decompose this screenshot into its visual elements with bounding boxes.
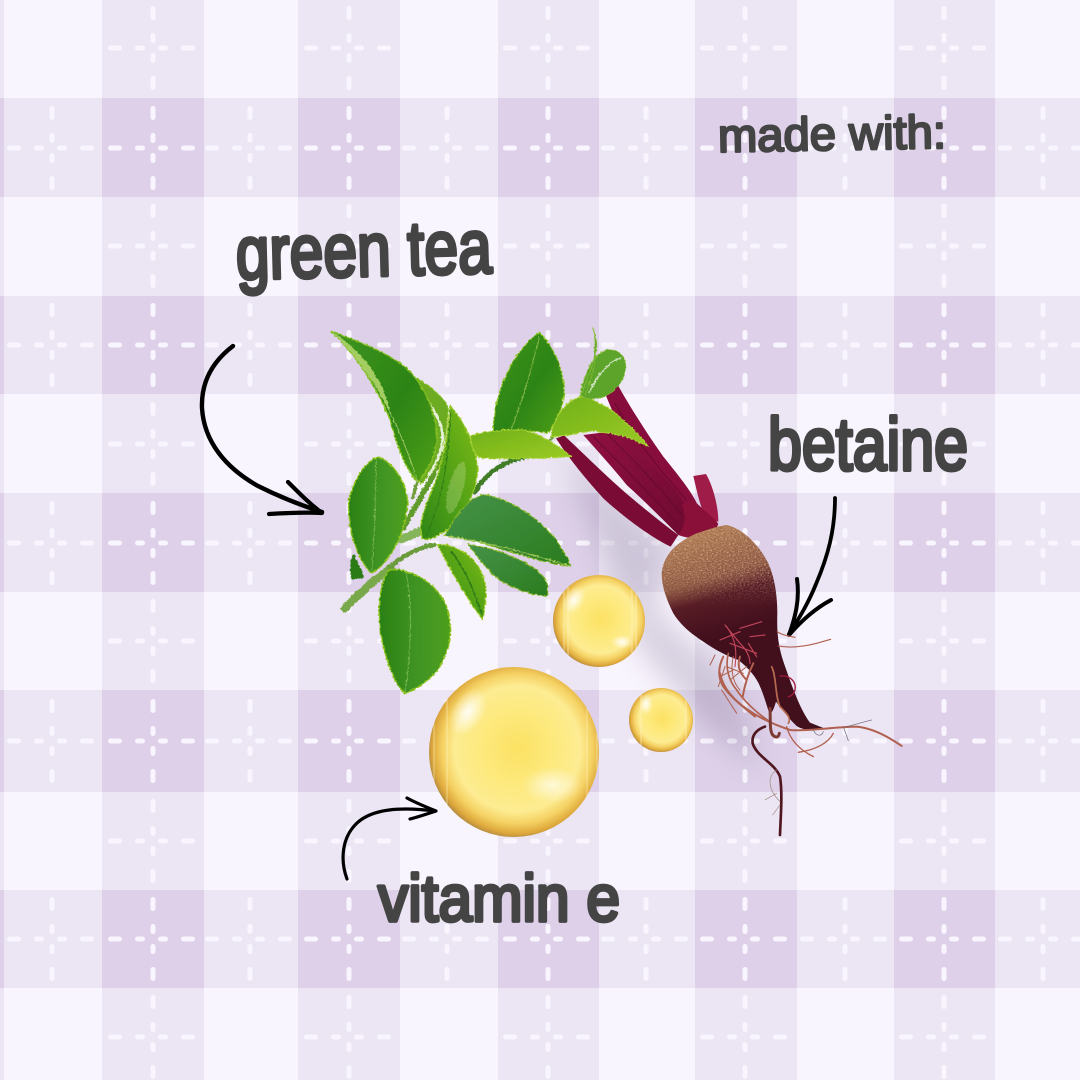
tea leaf: right <box>550 395 647 446</box>
arrow: betaine <box>789 498 835 635</box>
tea leaf: back upper <box>393 365 447 483</box>
tea leaf: left <box>347 456 407 572</box>
vitamin e drops <box>429 575 693 837</box>
drop: medium <box>553 575 645 667</box>
tea leaf: behind right <box>467 543 547 595</box>
tea leaf: center <box>420 405 477 538</box>
drop: large <box>429 667 599 837</box>
label: betaine: betaine <box>768 403 968 486</box>
beet skin texture <box>662 525 776 604</box>
label: green tea: green tea <box>235 205 493 296</box>
tea leaf: top left <box>329 330 436 481</box>
tea leaf: bottom <box>378 568 449 693</box>
arrow: green tea <box>202 346 322 514</box>
arrow: vitamin e <box>343 798 436 879</box>
tea leaf: big right <box>443 493 570 566</box>
green tea sprig <box>329 327 647 693</box>
drop: small <box>629 688 693 752</box>
tea leaf: drooping <box>437 544 485 618</box>
tea stems <box>344 430 560 607</box>
soft shadow under beet <box>560 450 760 770</box>
tea leaf: small lower left <box>349 553 363 578</box>
tea leaf: mid <box>469 429 570 458</box>
label: vitamin e: vitamin e <box>378 861 620 935</box>
beet root body <box>662 525 824 730</box>
tea bud <box>579 327 625 398</box>
beetroot stalks <box>556 386 718 547</box>
beet roots <box>710 622 902 835</box>
heading: made with: made with: <box>718 105 946 162</box>
tea leaf: upper <box>492 332 563 432</box>
beetroot <box>658 523 902 835</box>
